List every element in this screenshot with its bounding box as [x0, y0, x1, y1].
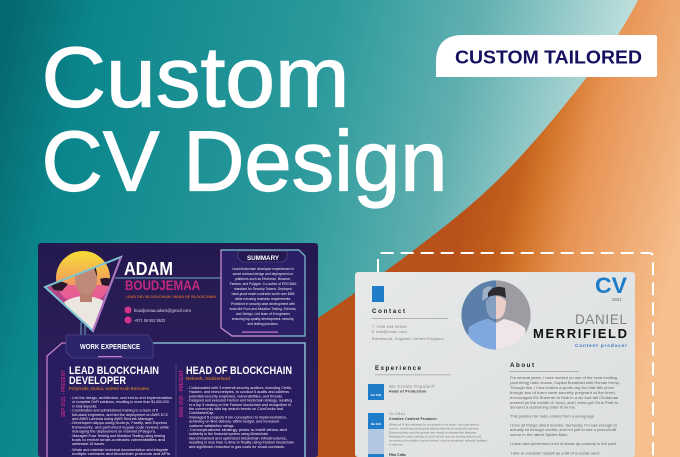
about section: though two of them were secretly pregnant at the time),	[510, 390, 616, 395]
about section: About	[510, 362, 534, 369]
panel: summary: smart contract design and deployment on	[233, 272, 293, 276]
panel: summary: and testing practices.	[247, 322, 279, 326]
column: lead blockchain developer: DEVELOPER	[69, 375, 126, 387]
column: head of blockchain	[179, 365, 294, 449]
about section: scene in the latest Spider-Man.	[510, 432, 568, 437]
panel: summary	[221, 250, 305, 336]
panel: neon resume	[38, 243, 318, 457]
column: lead blockchain developer	[61, 365, 172, 456]
experience entries: moments to do outside of guest content, such as broadcast, editorial, holidays	[389, 438, 488, 442]
title: Custom	[42, 30, 350, 126]
experience entries: or video etc.	[389, 442, 403, 446]
experience entries: Ensuring they and the guests are ready to elevate the features.	[389, 430, 477, 434]
column: lead blockchain developer: - Developed dApps using Node.js, Fastify, and Express	[70, 421, 167, 425]
column divider	[176, 364, 177, 457]
column: lead blockchain developer: SEP 2021 - PRESENT	[61, 370, 67, 417]
column: head of blockchain: - Conceptualized strategy plans to instill ethics and	[187, 428, 287, 432]
experience entries	[368, 384, 488, 457]
column: head of blockchain: the community with top search trends on CoinGecko and	[189, 407, 283, 411]
title	[42, 30, 448, 210]
background: orange curved area	[200, 0, 680, 457]
name and role	[124, 262, 216, 298]
experience entries: Mar 2021	[371, 423, 382, 426]
panel: summary: and Vertigo. Led team of 8 engineers	[236, 312, 290, 316]
column: lead blockchain developer: LEAD BLOCKCHAIN	[69, 365, 159, 377]
column: head of blockchain: solidarity in the financial system using Blockchain.	[189, 432, 269, 436]
contact details: boudjemaa.adam@gmail.com	[134, 308, 191, 313]
panel: white resume	[355, 272, 635, 457]
heading: work experience	[66, 335, 153, 358]
column: head of blockchain: - Managed 5 projects from conception to implementation,	[187, 415, 287, 419]
experience entries: Film Critic	[389, 453, 406, 457]
column: lead blockchain developer: tools to reveal smart-contracts vulnerabilities and	[72, 438, 165, 442]
column: head of blockchain: Retreeb, Switzerland	[186, 376, 230, 381]
cv mark: CV	[595, 273, 627, 298]
about section: demand a restraining order from me.	[510, 404, 576, 410]
contact section: Contact	[372, 308, 405, 315]
portrait	[460, 280, 532, 350]
column: lead blockchain developer: - Managed Fuzz Testing and Mutation Testing using testing	[70, 434, 165, 438]
experience entries: Writing all of the interviews for our guests on the show - from pop stars to	[389, 422, 480, 426]
name: daniel merrifield: Content producer	[575, 343, 627, 349]
column: lead blockchain developer: frameworks, and performed regular code reviews while	[72, 425, 169, 429]
experience entries: cinema - as well as producing the features that they do during the interview.	[389, 426, 479, 430]
heading: work experience: WORK EXPERIENCE	[80, 344, 140, 351]
column: lead blockchain developer: Polytrade, Dubai, United Arab Emirates	[69, 386, 150, 391]
column: head of blockchain: and significant reduction in gas costs for smart-contracts.	[189, 445, 285, 449]
connector line	[81, 278, 221, 336]
column: head of blockchain: Hacken, and Immunebytes, to conduct 5 audits and address	[189, 390, 289, 394]
about section: actually sit through credits, and not just to see a post-credit	[510, 427, 617, 432]
photo triangle with sun	[45, 251, 121, 334]
experience entries: GLOBAL	[389, 412, 406, 416]
dashed selection frame	[378, 253, 653, 457]
badge: custom tailored: CUSTOM TAILORED	[455, 46, 642, 68]
about section: This passion for radio comes from a young age.	[510, 414, 595, 418]
panel: summary: Proficient in security-wise development with	[231, 302, 295, 306]
experience heading: Experience	[375, 365, 422, 372]
contact section: T +438 948 69946	[372, 325, 407, 329]
name and role: LEAD DEV BLOCKCHAIN / HEAD OF BLOCKCHAIN	[126, 294, 216, 299]
experience entries: Nov 2022	[371, 394, 382, 397]
name: daniel merrifield: MERRIFIELD	[533, 326, 627, 341]
experience entries: Head of Production	[389, 390, 427, 394]
column: head of blockchain: - Benchmarked and optimized blockchain infrastructures,	[187, 436, 287, 440]
about section: Through this, I have hosted a sports day for Little Mix (even	[510, 385, 614, 390]
column: head of blockchain: customer satisfaction ratings.	[189, 424, 234, 428]
about section	[509, 362, 620, 456]
title: CV Design	[42, 114, 448, 210]
column: lead blockchain developer: multiple contracts and blockchain protocols and APIs	[72, 452, 170, 456]
about section: For several years, I have worked on one of the most exciting	[510, 375, 617, 380]
column: lead blockchain developer: and AWS Lambda using AWS Secrets Manager.	[72, 417, 154, 421]
badge: custom tailored	[436, 35, 657, 77]
panel: summary: tools like Fuzz and Mutation Testing, Echidna,	[230, 307, 296, 311]
column: head of blockchain: - Designed and executed Fantom and blockchain strategy, resulting	[187, 399, 292, 403]
name: daniel merrifield	[534, 314, 627, 348]
column: head of blockchain: MAR 2020 - PRESENT	[179, 370, 185, 417]
about section: I have also performed a lot of stand-up comedy in the past.	[510, 441, 617, 446]
column: lead blockchain developer: of complete DeFi solutions, resulting in more than $1,000,000	[72, 400, 169, 404]
panel: summary: hack-proof smart contracts worth over $5M	[232, 292, 295, 296]
contact section: Brentwood, England, United Kingdom	[372, 337, 444, 341]
about section: encouraged Ed Sheeran to hide in a six foot tall Christmas	[510, 395, 618, 400]
name: daniel merrifield: DANIEL	[575, 312, 627, 327]
column: head of blockchain: resulting in less than ¼ time to finality using Fantom blockchain	[189, 441, 294, 445]
about section: I love all things about movies. Seriously, I'm sad enough to	[510, 422, 617, 428]
column: lead blockchain developer: - Coordinated and administered training to a team of 5	[70, 409, 158, 413]
panel: work experience frame	[47, 343, 305, 457]
panel: summary: Lead blockchain developer experienced in	[232, 267, 294, 271]
contact section	[372, 308, 448, 341]
about section: present (in the middle of June), and I even got Chris Pratt to	[510, 400, 618, 405]
experience heading	[375, 365, 451, 375]
column: head of blockchain: CoinMarketCap.	[189, 411, 214, 415]
column: lead blockchain developer: - Led the design, architecture, and end-to-end implementation	[70, 396, 172, 400]
name and role: ADAM	[124, 259, 173, 279]
cv mark: 2021	[612, 297, 622, 302]
panel: summary: ensuring top-quality development, security,	[232, 317, 294, 321]
column: lead blockchain developer: full-stack engineers, and led the deployment on AWS EC2	[72, 413, 168, 417]
column: head of blockchain: achieving on-time delivery, within budget, and increased	[189, 420, 279, 424]
column: head of blockchain: HEAD OF BLOCKCHAIN	[186, 365, 292, 377]
panel: summary: platforms such as Ethereum, Binance,	[235, 277, 291, 281]
column: lead blockchain developer: in total deposits.	[72, 404, 97, 408]
column: head of blockchain: potential security loopholes, vulnerabilities, and threats.	[189, 394, 283, 398]
contact details	[124, 306, 191, 324]
column: head of blockchain: - Collaborated with 3 external security auditors, including Certik,	[187, 386, 292, 390]
contact section: E info@email.com	[372, 330, 407, 334]
experience entries: We Create Popular®	[389, 384, 435, 389]
name and role: BOUDJEMAA	[125, 277, 200, 293]
accent block	[372, 286, 384, 302]
panel: summary: standard for Security Tokens. Deployed	[234, 287, 292, 291]
panel: summary: SUMMARY	[247, 255, 280, 262]
panel: summary: Fantom, and Polygon. Co-author of ERC3643	[230, 282, 297, 286]
experience entries: Creative Content Producer	[389, 417, 437, 421]
about section: (and tiring) radio shows, Capital Breakfast with Roman Kemp.	[510, 380, 620, 385]
column: lead blockchain developer: addressed 15 issues.	[72, 442, 105, 446]
panel: summary: while ensuring business requirements.	[235, 297, 291, 301]
experience entries: Managing the yearly calendar to cover all with new and exciting features and	[389, 434, 482, 438]
column: head of blockchain: in a top 3 ranking on the Fantom blockchain and recognition in	[189, 403, 291, 407]
column: lead blockchain developer: managing the deployment on mainnet (Polygon).	[72, 430, 156, 434]
column: lead blockchain developer: - Wrote and maintain technical documentation and integrate	[70, 448, 168, 452]
cv mark	[596, 278, 627, 301]
about section: I like to consider myself as a bit of a social nerd.	[511, 450, 600, 456]
contact details: +971 58 552 9533	[134, 318, 165, 323]
